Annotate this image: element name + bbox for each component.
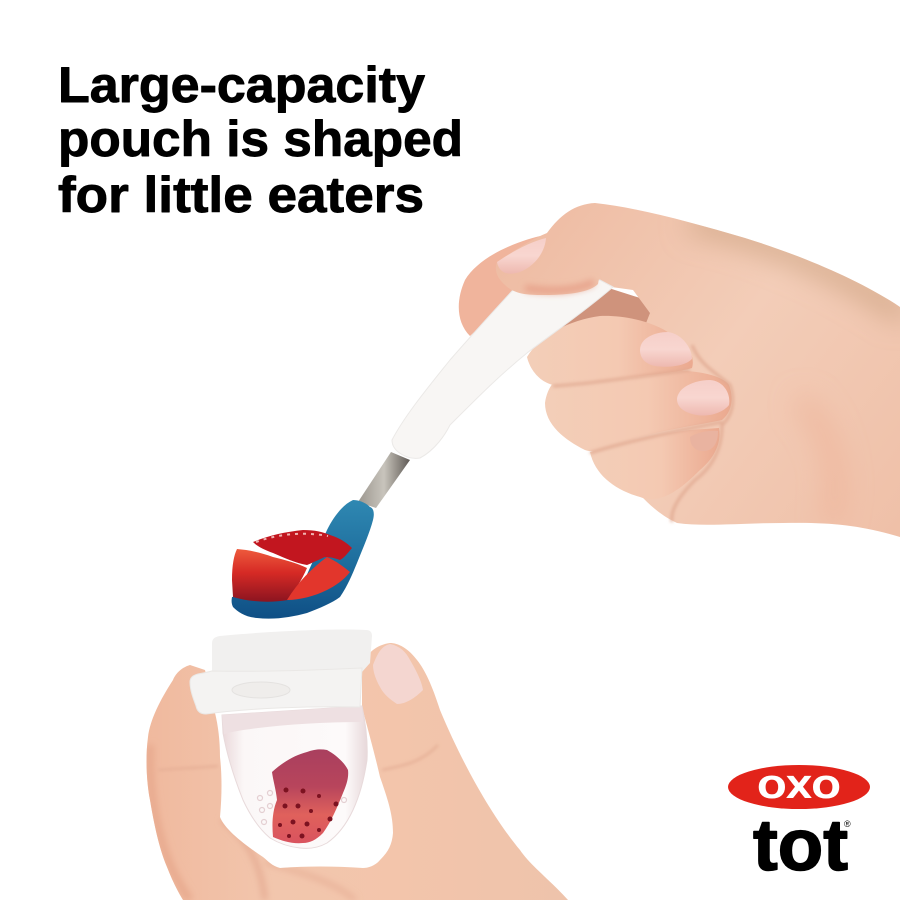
title: pouch is shaped [58,111,463,167]
title [58,57,463,223]
title: for little eaters [58,167,424,223]
palm and back of hand [547,203,900,537]
lower hand holding pouch [147,643,568,900]
collar logo [232,682,290,698]
pouch silicone cup [222,706,367,848]
nail: thumb [497,238,546,274]
nail: middle finger [677,380,729,416]
pouch top band [222,706,363,734]
berry: right piece [287,557,350,600]
rear fingertip behind handle [459,235,565,336]
nail: index finger [640,332,692,367]
brand logo [728,765,870,886]
spoon [232,280,613,619]
berry: top piece [253,530,352,565]
index finger [527,316,693,385]
spoon stem [358,452,410,508]
thumb over spoon handle [496,232,602,295]
collar top [212,629,372,672]
spoon white handle [392,280,613,458]
thumb [496,232,602,295]
feeder pouch [190,629,372,848]
strawberry in pouch [272,749,348,843]
dark gap between handle and palm [555,284,665,335]
ring finger [590,428,720,499]
thumb underside shadow [525,282,594,290]
logo registered mark: ® [844,819,851,829]
logo tot text: tot [753,806,848,886]
nail: right finger [373,644,423,704]
upper hand holding spoon [459,203,900,537]
hand shading [150,745,438,900]
strawberries on spoon [232,530,352,602]
logo oxo text: OXO [757,771,841,806]
berry: top speckle [256,534,328,542]
spoon blue bowl [232,500,374,619]
berry: left piece [232,549,307,602]
middle finger [545,370,732,451]
flange ring [190,668,362,714]
finger crease shadows [553,345,733,522]
title: Large-capacity [58,57,425,113]
small seeds on pouch wall [258,790,346,824]
nail: ring finger [690,431,718,451]
palm shading [686,222,900,480]
strawberry seeds [278,788,338,838]
thumb and palm [147,643,568,900]
logo red oval [728,765,870,809]
